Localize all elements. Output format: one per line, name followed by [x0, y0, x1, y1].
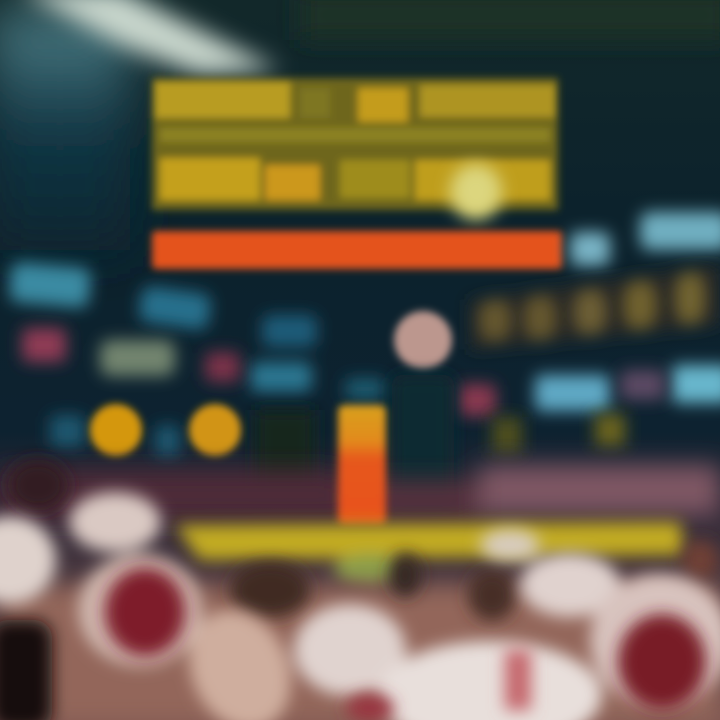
crowd base	[0, 585, 720, 720]
scoreboard: orange bar	[152, 231, 562, 269]
central figure head	[394, 311, 452, 369]
crowd mid band	[0, 465, 720, 520]
ceiling light streak	[20, 0, 280, 75]
white helmets	[0, 492, 720, 720]
yellow round icons	[90, 404, 241, 456]
dark heads	[0, 459, 718, 720]
orange column	[338, 405, 386, 525]
central figure body	[392, 375, 454, 505]
dark panels	[255, 410, 625, 490]
yellow field strip	[175, 522, 685, 586]
right gold banner	[470, 265, 720, 350]
maroon helmet logos	[105, 568, 706, 720]
left pillar	[0, 10, 130, 250]
scoreboard: yellow panel	[152, 78, 558, 210]
ceiling	[300, 0, 720, 40]
colored signs	[22, 328, 665, 416]
scoreboard light	[450, 164, 502, 220]
blue signs row	[8, 212, 720, 457]
